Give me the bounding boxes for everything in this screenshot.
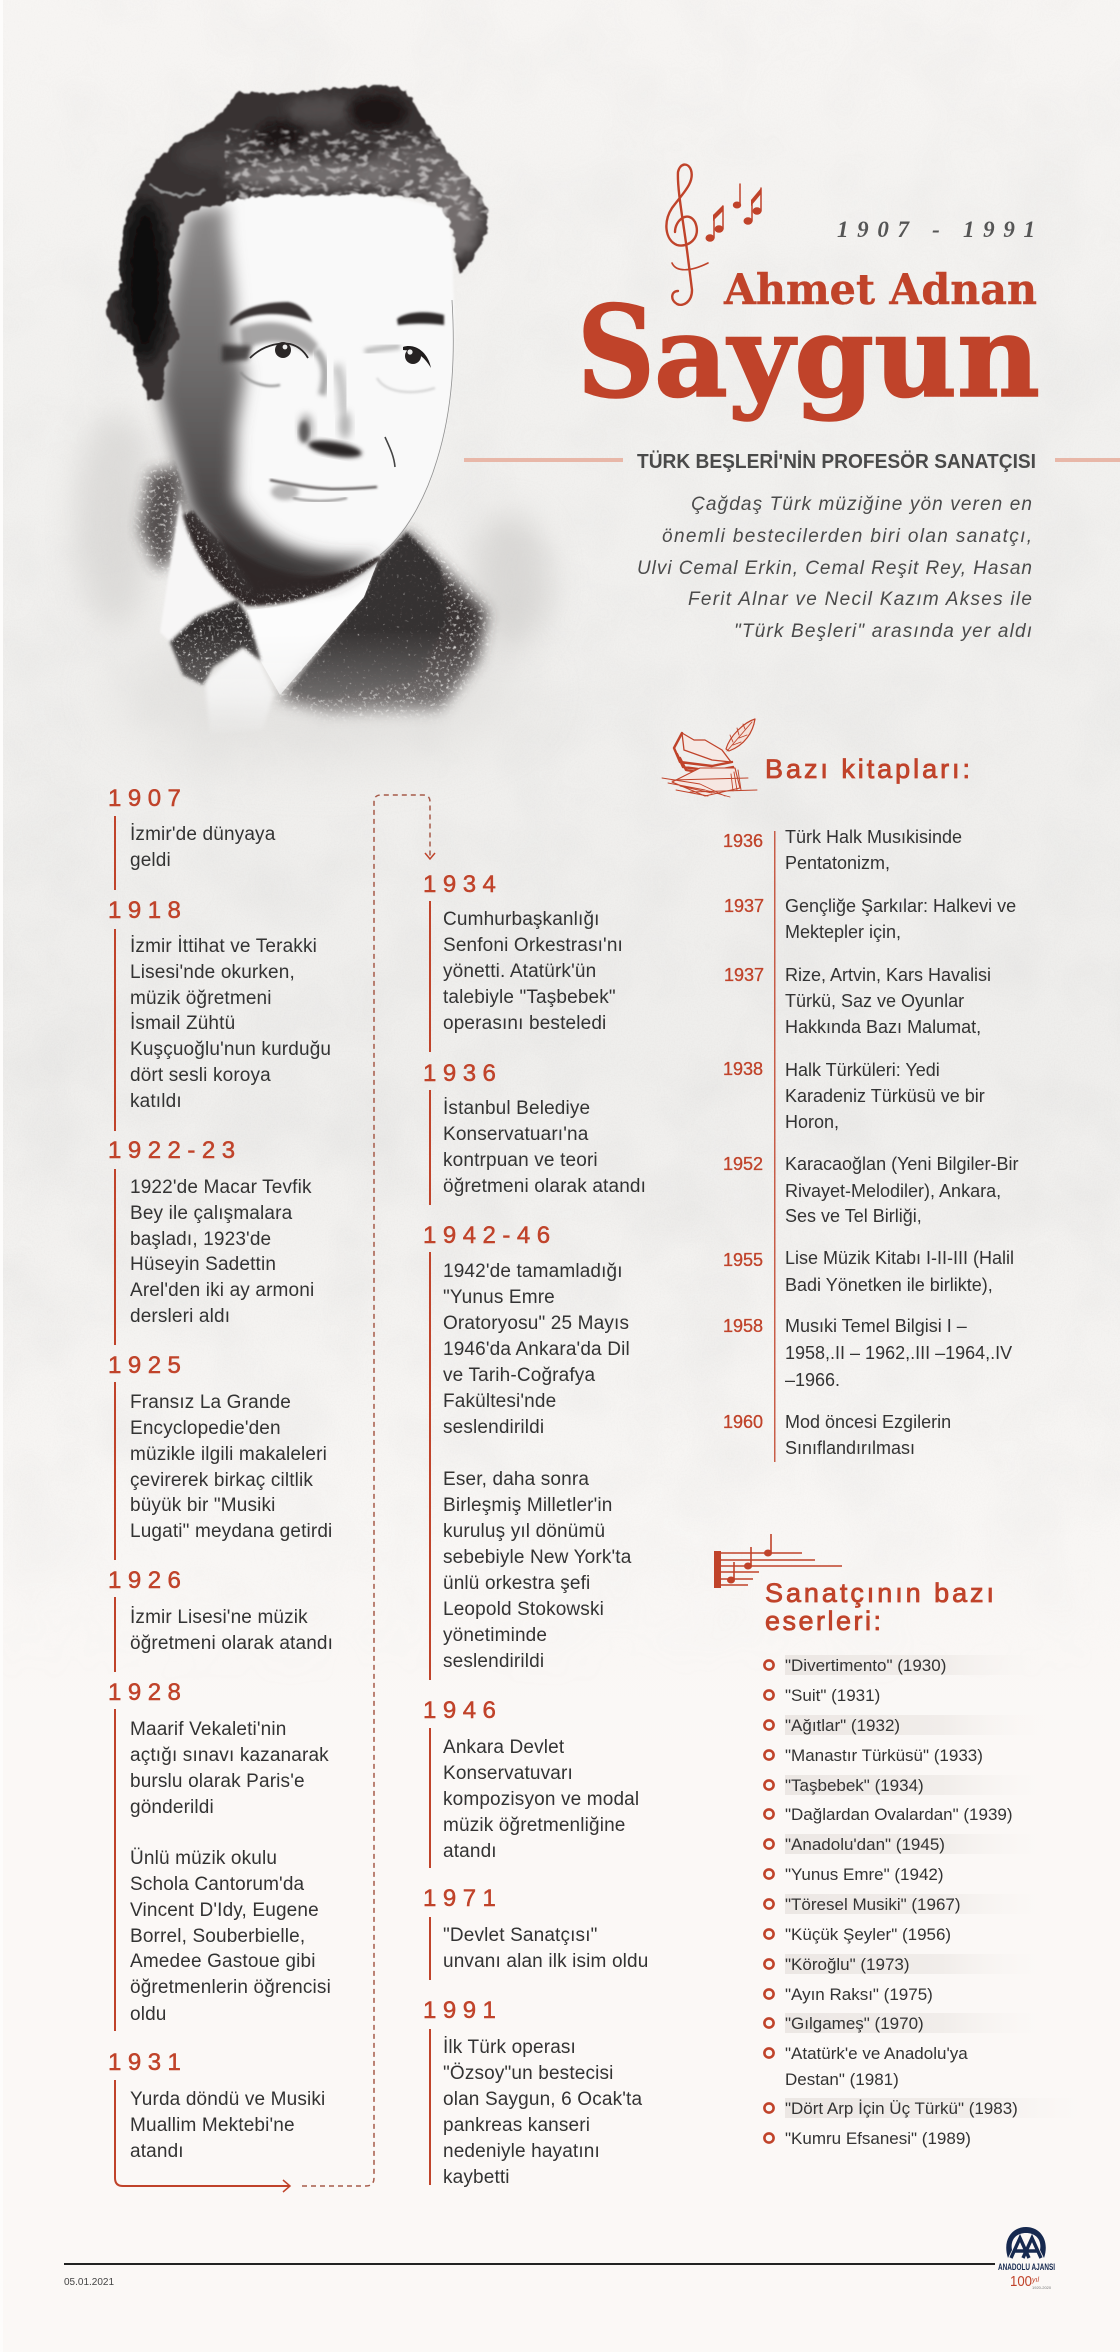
book 1937: Gençliğe Şarkılar: Halkevi ve <box>785 896 1016 916</box>
item 1918: Kuşçuoğlu'nun kurduğu <box>130 1039 331 1060</box>
book 1938 <box>723 1059 985 1132</box>
work titles: "Manastır Türküsü" (1933) <box>785 1746 983 1765</box>
item 1922-23 <box>108 1137 314 1345</box>
item 1934: operasını besteledi <box>443 1013 606 1034</box>
item 1925: 1925 <box>108 1352 187 1379</box>
item 1971: unvanı alan ilk isim oldu <box>443 1951 648 1972</box>
book 1955: Lise Müzik Kitabı I-II-III (Halil <box>785 1248 1014 1268</box>
item 1936: kontrpuan ve teori <box>443 1150 598 1171</box>
item 1991: pankreas kanseri <box>443 2115 590 2136</box>
book 1938: Horon, <box>785 1112 839 1132</box>
item 1918: İzmir İttihat ve Terakki <box>130 936 317 957</box>
footer date: 05.01.2021 <box>64 2277 114 2288</box>
book 1937 second: Hakkında Bazı Malumat, <box>785 1017 981 1037</box>
dates: 1907 - 1991 <box>837 217 1035 242</box>
item 1946: atandı <box>443 1841 497 1862</box>
subtitle with rules: TÜRK BEŞLERİ'NİN PROFESÖR SANATÇISI <box>637 450 1036 473</box>
work titles: "Divertimento" (1930) <box>785 1656 946 1675</box>
work titles: "Suit" (1931) <box>785 1686 880 1705</box>
item 1922-23: 1922'de Macar Tevfik <box>130 1177 312 1198</box>
item 1926 <box>108 1567 333 1672</box>
book 1960: Sınıflandırılması <box>785 1438 915 1458</box>
item 1931 <box>108 2049 325 2162</box>
item 1942-46: Birleşmiş Milletler'in <box>443 1495 613 1516</box>
item 1936: Konservatuarı'na <box>443 1124 589 1145</box>
item 1936: öğretmeni olarak atandı <box>443 1176 646 1197</box>
item 1934: Senfoni Orkestrası'nı <box>443 935 623 956</box>
highlight bands <box>785 1655 1090 2118</box>
item 1934 <box>423 871 623 1052</box>
item 1925: müzikle ilgili makaleleri <box>130 1444 327 1465</box>
list: books <box>723 827 1018 1462</box>
right jacket <box>278 530 487 715</box>
face <box>159 190 454 579</box>
item 1928: Schola Cantorum'da <box>130 1874 305 1895</box>
timeline column 1 <box>108 785 333 2162</box>
book 1936: Pentatonizm, <box>785 853 890 873</box>
brows <box>230 302 312 326</box>
intro paragraph <box>637 494 1032 642</box>
item 1991: "Özsoy"un bestecisi <box>443 2063 614 2084</box>
book 1936 <box>723 827 962 873</box>
work titles: Destan" (1981) <box>785 2070 899 2089</box>
item 1942-46: ve Tarih-Coğrafya <box>443 1365 595 1386</box>
item 1928: Ünlü müzik okulu <box>130 1848 277 1869</box>
item 1922-23: Arel'den iki ay armoni <box>130 1280 314 1301</box>
item 1907 <box>108 785 276 890</box>
book 1937 second <box>724 965 991 1037</box>
book 1936: Türk Halk Musıkisinde <box>785 827 962 847</box>
item 1925: Fransız La Grande <box>130 1392 291 1413</box>
item 1928: Vincent D'Idy, Eugene <box>130 1900 319 1921</box>
item 1925 <box>108 1352 332 1560</box>
intro paragraph: Ferit Alnar ve Necil Kazım Akses ile <box>688 589 1032 610</box>
intro paragraph: Çağdaş Türk müziğine yön veren en <box>691 494 1032 515</box>
intro paragraph: Ulvi Cemal Erkin, Cemal Reşit Rey, Hasan <box>637 558 1032 579</box>
work titles: "Köroğlu" (1973) <box>785 1955 910 1974</box>
shirt and collars <box>160 500 378 735</box>
item 1931: atandı <box>130 2141 184 2162</box>
item 1925: Encyclopedie'den <box>130 1418 281 1439</box>
item 1907: geldi <box>130 850 171 871</box>
item 1991: İlk Türk operası <box>443 2037 576 2058</box>
item 1991: 1991 <box>423 1997 502 2024</box>
item 1934: talebiyle "Taşbebek" <box>443 987 616 1008</box>
work titles <box>785 1656 1018 2148</box>
item 1936: 1936 <box>423 1060 502 1087</box>
item 1942-46 <box>423 1222 632 1680</box>
heading: works <box>765 1578 994 1636</box>
item 1928: gönderildi <box>130 1797 214 1818</box>
book 1952: Rivayet-Melodiler), Ankara, <box>785 1181 1001 1201</box>
work titles: "Dört Arp İçin Üç Türkü" (1983) <box>785 2099 1018 2118</box>
item 1942-46: seslendirildi <box>443 1417 544 1438</box>
work titles: "Taşbebek" (1934) <box>785 1776 924 1795</box>
item 1991 <box>423 1997 642 2188</box>
item 1928: 1928 <box>108 1679 187 1706</box>
item 1971 <box>423 1885 648 1980</box>
book 1958: 1958 <box>723 1316 763 1336</box>
mouth <box>270 480 377 489</box>
item 1942-46: Leopold Stokowski <box>443 1599 604 1620</box>
item 1946: kompozisyon ve modal <box>443 1789 639 1810</box>
book 1952: 1952 <box>723 1154 763 1174</box>
paper background <box>3 0 1120 1566</box>
work titles: "Atatürk'e ve Anadolu'ya <box>785 2044 968 2063</box>
logo: Anadolu Ajansı <box>998 2227 1055 2290</box>
book 1937: 1937 <box>724 896 764 916</box>
eye sockets <box>240 322 318 356</box>
item 1934: yönetti. Atatürk'ün <box>443 961 596 982</box>
item 1928: Maarif Vekaleti'nin <box>130 1719 286 1740</box>
item 1942-46: 1946'da Ankara'da Dil <box>443 1339 630 1360</box>
icon: books and quill <box>662 719 757 797</box>
book 1958: Musıki Temel Bilgisi I – <box>785 1316 967 1336</box>
book 1960: Mod öncesi Ezgilerin <box>785 1412 951 1432</box>
book 1958: 1958,.II – 1962,.III –1964,.IV <box>785 1343 1012 1363</box>
footer rule <box>64 2263 995 2265</box>
item 1907: 1907 <box>108 785 187 812</box>
work titles: "Dağlardan Ovalardan" (1939) <box>785 1805 1013 1824</box>
item 1922-23: Hüseyin Sadettin <box>130 1254 276 1275</box>
work titles: "Yunus Emre" (1942) <box>785 1865 944 1884</box>
item 1942-46: Fakültesi'nde <box>443 1391 556 1412</box>
item 1942-46: "Yunus Emre <box>443 1287 555 1308</box>
book 1937 second: Türkü, Saz ve Oyunlar <box>785 991 964 1011</box>
arrow: column link dashed <box>302 795 435 2186</box>
item 1925: çevirerek birkaç ciltlik <box>130 1470 313 1491</box>
item 1931: Muallim Mektebi'ne <box>130 2115 295 2136</box>
item 1931: 1931 <box>108 2049 187 2076</box>
face shaded side <box>160 205 378 592</box>
book 1960: 1960 <box>723 1412 763 1432</box>
book 1960 <box>723 1412 951 1458</box>
book 1937: Mektepler için, <box>785 922 901 942</box>
item 1946: müzik öğretmenliğine <box>443 1815 626 1836</box>
book 1937 <box>724 896 1016 942</box>
item 1942-46: kuruluş yıl dönümü <box>443 1521 605 1542</box>
heading: works: Sanatçının bazı <box>765 1578 994 1608</box>
logo: Anadolu Ajansı: ANADOLU AJANSI <box>998 2262 1055 2272</box>
item 1928: burslu olarak Paris'e <box>130 1771 305 1792</box>
item 1918: 1918 <box>108 897 187 924</box>
item 1928: Amedee Gastoue gibi <box>130 1951 316 1972</box>
portrait photo <box>75 80 550 760</box>
book 1952 <box>723 1154 1018 1226</box>
item 1928: öğretmenlerin öğrencisi <box>130 1977 331 1998</box>
item 1925: büyük bir "Musiki <box>130 1495 276 1516</box>
subtitle with rules <box>464 450 1120 473</box>
work titles: "Küçük Şeyler" (1956) <box>785 1925 951 1944</box>
item 1934: 1934 <box>423 871 502 898</box>
item 1936: İstanbul Belediye <box>443 1098 590 1119</box>
book 1936: 1936 <box>723 831 763 851</box>
item 1926: İzmir Lisesi'ne müzik <box>130 1607 308 1628</box>
item 1942-46: Oratoryosu" 25 Mayıs <box>443 1313 629 1334</box>
item 1942-46: seslendirildi <box>443 1651 544 1672</box>
item 1918 <box>108 897 331 1131</box>
item 1918: İsmail Zühtü <box>130 1013 235 1034</box>
icon: music staff <box>714 1534 842 1588</box>
heading: books: Bazı kitapları: <box>765 754 970 784</box>
item 1926: öğretmeni olarak atandı <box>130 1633 333 1654</box>
item 1971: 1971 <box>423 1885 502 1912</box>
book 1955 <box>723 1248 1014 1295</box>
left shoulder <box>140 467 182 570</box>
book 1938: Halk Türküleri: Yedi <box>785 1060 940 1080</box>
timeline column 2 <box>423 871 648 2188</box>
item 1946: Konservatuvarı <box>443 1763 573 1784</box>
item 1926: 1926 <box>108 1567 187 1594</box>
item 1922-23: Bey ile çalışmalara <box>130 1203 293 1224</box>
intro paragraph: "Türk Beşleri" arasında yer aldı <box>734 621 1032 642</box>
item 1928: oldu <box>130 2004 167 2025</box>
item 1942-46: yönetiminde <box>443 1625 547 1646</box>
logo: Anadolu Ajansı: yıl <box>1031 2277 1039 2284</box>
item 1922-23: başladı, 1923'de <box>130 1229 271 1250</box>
eyes <box>250 344 308 358</box>
work titles: "Töresel Musiki" (1967) <box>785 1895 961 1914</box>
item 1934: Cumhurbaşkanlığı <box>443 909 600 930</box>
title: Ahmet Adnan: Ahmet Adnan <box>723 265 1037 314</box>
item 1918: müzik öğretmeni <box>130 988 272 1009</box>
item 1946: Ankara Devlet <box>443 1737 565 1758</box>
book 1938: 1938 <box>723 1059 763 1079</box>
book 1958: –1966. <box>785 1370 840 1390</box>
book 1955: Badi Yönetken ile birlikte), <box>785 1275 993 1295</box>
book 1937 second: Rize, Artvin, Kars Havalisi <box>785 965 991 985</box>
item 1928: Borrel, Souberbielle, <box>130 1926 305 1947</box>
item 1918: Lisesi'nde okurken, <box>130 962 295 983</box>
item 1991: kaybetti <box>443 2167 510 2188</box>
book 1958 <box>723 1316 1012 1390</box>
work titles: "Kumru Efsanesi" (1989) <box>785 2129 971 2148</box>
nose <box>336 365 344 412</box>
logo: Anadolu Ajansı: 1920-2020 <box>1032 2285 1052 2290</box>
logo: Anadolu Ajansı: 100 <box>1010 2273 1032 2290</box>
work titles: "Ayın Raksı" (1975) <box>785 1985 933 2004</box>
item 1942-46: Eser, daha sonra <box>443 1469 589 1490</box>
item 1931: Yurda döndü ve Musiki <box>130 2089 325 2110</box>
neck shadow <box>183 490 381 606</box>
item 1942-46: sebebiyle New York'ta <box>443 1547 632 1568</box>
work titles: "Ağıtlar" (1932) <box>785 1716 900 1735</box>
item 1991: nedeniyle hayatını <box>443 2141 600 2162</box>
item 1928: açtığı sınavı kazanarak <box>130 1745 329 1766</box>
item 1946: 1946 <box>423 1697 502 1724</box>
heading: works: eserleri: <box>765 1606 881 1636</box>
title: Saygun: S <box>577 278 655 426</box>
intro paragraph: önemli bestecilerden biri olan sanatçı, <box>662 526 1032 547</box>
hair <box>100 80 495 410</box>
item 1942-46: 1942'de tamamladığı <box>443 1261 623 1282</box>
bullets <box>764 1660 774 2143</box>
work titles: "Gılgameş" (1970) <box>785 2014 924 2033</box>
list: works <box>764 1655 1090 2148</box>
item 1991: olan Saygun, 6 Ocak'ta <box>443 2089 642 2110</box>
book 1955: 1955 <box>723 1250 763 1270</box>
item 1971: "Devlet Sanatçısı" <box>443 1925 598 1946</box>
item 1936 <box>423 1060 646 1205</box>
book 1937 second: 1937 <box>724 965 764 985</box>
book 1952: Ses ve Tel Birliği, <box>785 1206 922 1226</box>
item 1942-46: 1942-46 <box>423 1222 557 1249</box>
item 1918: dört sesli koroya <box>130 1065 271 1086</box>
book 1952: Karacaoğlan (Yeni Bilgiler-Bir <box>785 1154 1018 1174</box>
item 1928 <box>108 1679 331 2031</box>
work titles: "Anadolu'dan" (1945) <box>785 1835 945 1854</box>
item 1922-23: dersleri aldı <box>130 1306 230 1327</box>
item 1907: İzmir'de dünyaya <box>130 824 276 845</box>
item 1922-23: 1922-23 <box>108 1137 242 1164</box>
title: Saygun: aygun <box>654 292 1040 423</box>
item 1946 <box>423 1697 639 1868</box>
item 1925: Lugati" meydana getirdi <box>130 1521 332 1542</box>
book 1938: Karadeniz Türküsü ve bir <box>785 1086 985 1106</box>
item 1918: katıldı <box>130 1091 182 1112</box>
item 1942-46: ünlü orkestra şefi <box>443 1573 590 1594</box>
icon: treble clef and notes <box>666 165 762 305</box>
arrow: column link solid <box>115 2080 290 2192</box>
